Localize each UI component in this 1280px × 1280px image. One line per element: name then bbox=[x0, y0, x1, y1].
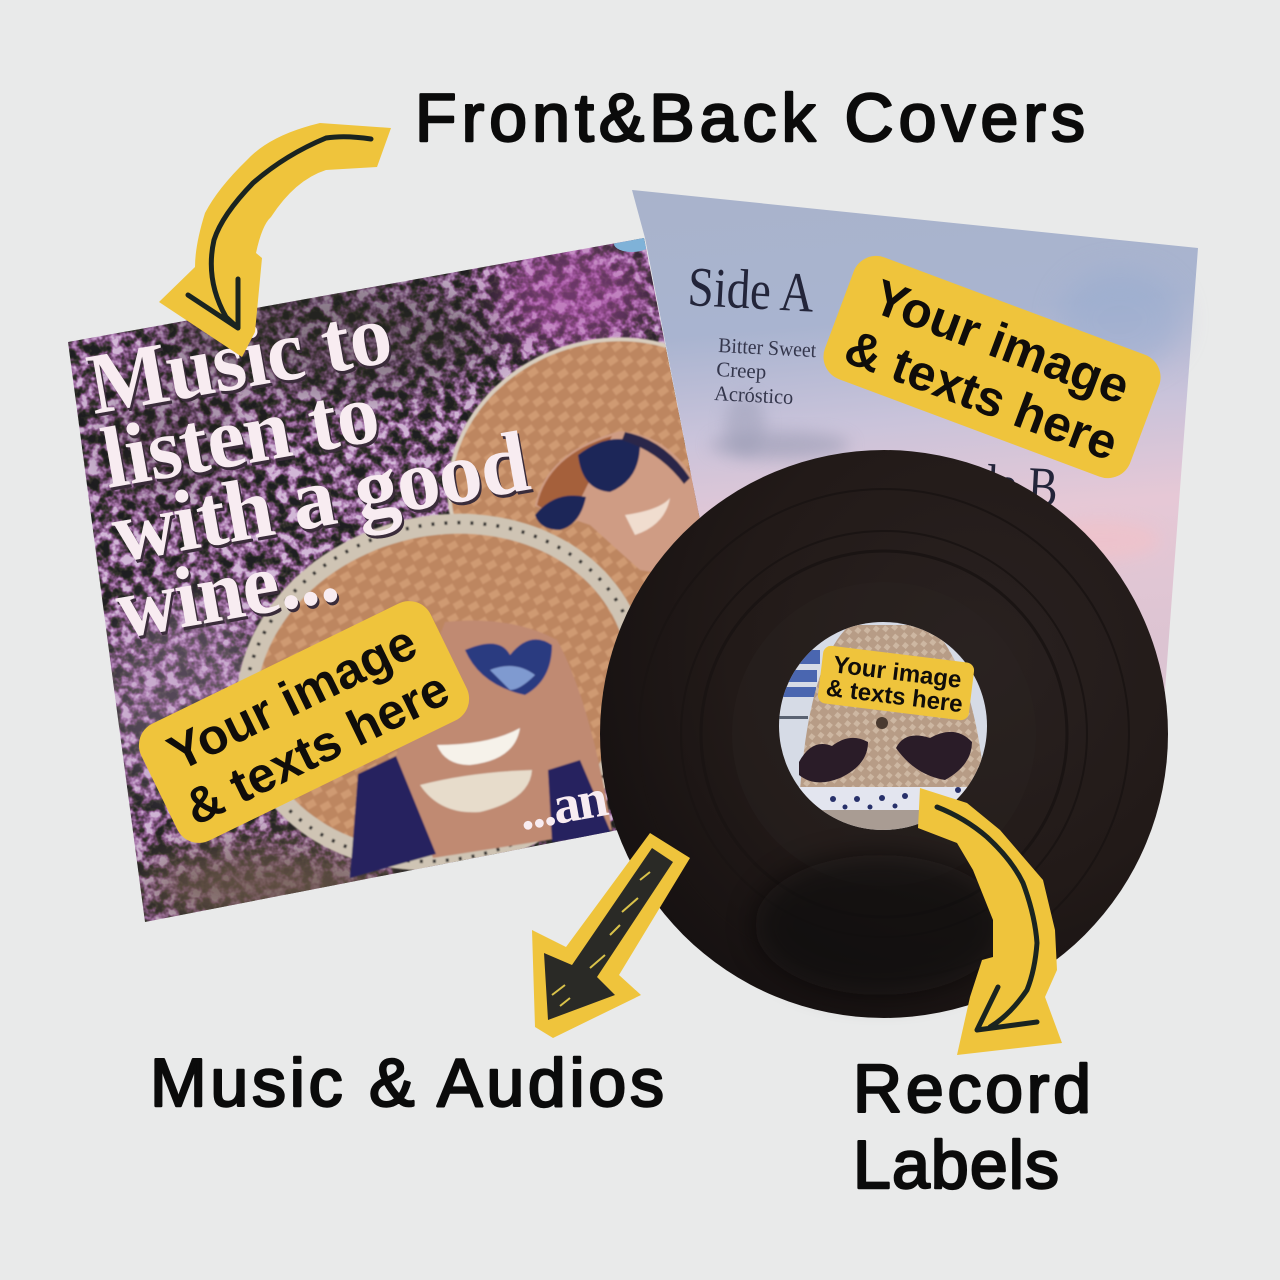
cover title: listen to bbox=[94, 363, 385, 507]
callout: back cover: & texts here bbox=[838, 319, 1125, 471]
heading: Side A: Side A bbox=[686, 256, 816, 325]
panel: front cover bbox=[68, 238, 700, 922]
arrow: music and audios bbox=[532, 833, 690, 1038]
photo: woman with hat bbox=[237, 512, 630, 879]
label: Record Labels: Record bbox=[853, 1051, 1091, 1127]
cover title: Music to bbox=[80, 284, 398, 433]
label: Music & Audios: Music & Audios bbox=[150, 1045, 664, 1121]
label: Record Labels: Labels bbox=[853, 1127, 1059, 1203]
callout: front cover bbox=[131, 593, 477, 851]
heading: Side B: Side B bbox=[936, 451, 1059, 519]
photo: man with hat bbox=[446, 336, 700, 607]
record label bbox=[779, 622, 987, 830]
label callout bbox=[817, 645, 975, 721]
arrow: record labels bbox=[918, 788, 1062, 1055]
track list: Acróstico bbox=[714, 381, 794, 409]
track list bbox=[714, 333, 817, 409]
callout: back cover bbox=[817, 249, 1167, 485]
callout: front cover: Your image bbox=[159, 614, 425, 782]
vinyl record bbox=[600, 450, 1168, 1018]
sunglasses bbox=[799, 732, 972, 782]
label callout: Your image bbox=[832, 651, 963, 694]
callout: front cover: & texts here bbox=[176, 660, 458, 836]
cover title: with a good bbox=[104, 412, 536, 581]
label: Record Labels bbox=[853, 1051, 1091, 1203]
track list: Creep bbox=[716, 357, 767, 384]
panel: back cover bbox=[632, 190, 1198, 690]
title: Front&Back Covers: Front&Back Covers bbox=[415, 80, 1085, 156]
spindle hole bbox=[876, 717, 888, 729]
cover subtitle: ...an bbox=[514, 767, 612, 842]
arrow: front and back covers bbox=[159, 123, 391, 357]
label callout: & texts here bbox=[825, 675, 964, 718]
cover title: wine... bbox=[108, 523, 344, 657]
callout: back cover: Your image bbox=[866, 268, 1137, 415]
cover title bbox=[80, 284, 536, 657]
track list: Bitter Sweet bbox=[718, 333, 817, 362]
